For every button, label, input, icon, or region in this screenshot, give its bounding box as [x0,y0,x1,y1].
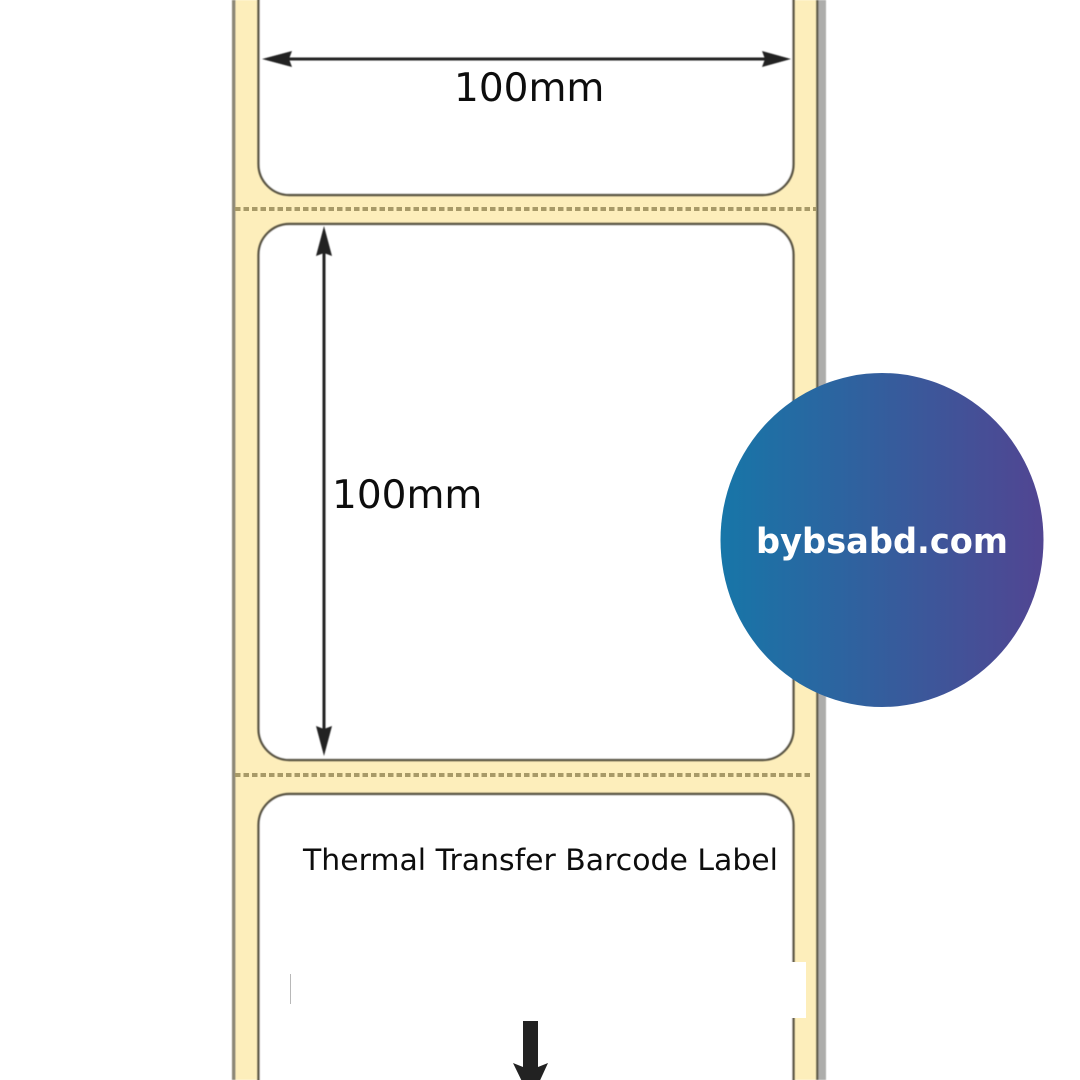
white cover patch [290,962,806,1018]
website badge: bybsabd.com [756,522,1008,562]
label roll backing strip [232,0,826,1080]
label: bottom [258,794,794,1080]
feed direction arrow [513,1021,548,1080]
website badge [720,373,1044,707]
width label: 100mm [454,66,604,111]
label: top [258,0,794,195]
height dimension arrow [316,226,332,756]
width dimension arrow [262,51,791,67]
product name: Thermal Transfer Barcode Label [302,843,778,877]
perforation line: upper [235,207,816,211]
height label: 100mm [332,473,482,518]
perforation line: lower [235,773,812,777]
label: middle [258,224,794,760]
